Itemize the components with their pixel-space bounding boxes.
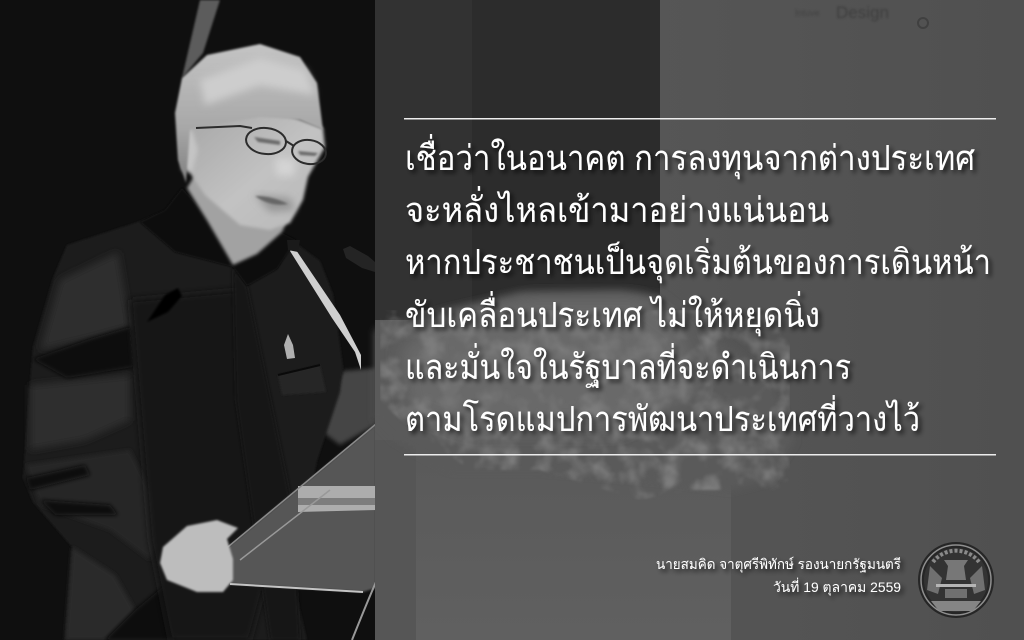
face — [182, 108, 325, 230]
microphone — [290, 247, 361, 370]
lectern — [223, 424, 376, 592]
main quote: ขับเคลื่อนประเทศ ไม่ให้หยุดนิ่ง — [405, 291, 820, 336]
chest shading — [130, 290, 280, 640]
faint screen wording: Design — [836, 3, 889, 22]
main quote: ตามโรดแมปการพัฒนาประเทศที่วางไว้ — [405, 395, 920, 439]
attribution — [656, 556, 901, 596]
faint screen wording — [795, 3, 928, 28]
pedestal box — [416, 425, 731, 640]
nose and mouth shadow — [255, 195, 295, 212]
jacket placket — [233, 267, 300, 640]
flowers behind lectern — [320, 368, 376, 445]
photo: speaker on dark stage — [0, 0, 376, 640]
bottom rule — [404, 454, 996, 456]
jacket shadow folds — [26, 327, 133, 515]
light right side — [375, 0, 1024, 640]
icon: government seal — [918, 542, 994, 618]
jacket — [23, 188, 343, 640]
glasses — [196, 126, 328, 166]
lapel pin — [284, 334, 295, 359]
pocket — [278, 365, 326, 395]
top rule — [404, 118, 996, 120]
panel: right overlay — [375, 0, 1024, 640]
dark flower mottling — [380, 310, 790, 500]
seal: lions — [927, 566, 985, 594]
forearm sheen — [26, 450, 165, 560]
nose — [276, 158, 296, 176]
attribution: นายสมคิด จาตุศรีพิทักษ์ รองนายกรัฐมนตรี — [656, 556, 901, 573]
trouser side — [65, 547, 135, 640]
flower mass — [375, 290, 795, 490]
main quote — [405, 134, 991, 439]
mic shadow — [147, 288, 182, 322]
collar — [140, 188, 296, 286]
seal: arc of dots — [933, 551, 979, 562]
main quote: และมั่นใจในรัฐบาลที่จะดำเนินการ — [405, 343, 851, 388]
stage banner strip — [182, 0, 220, 78]
mouth — [255, 196, 288, 205]
main quote: จะหลั่งไหลเข้ามาอย่างแน่นอน — [405, 186, 829, 230]
top dark column — [375, 0, 660, 320]
hair sheen — [200, 58, 315, 105]
ear — [180, 130, 198, 172]
light flower clusters — [400, 300, 700, 430]
seal: central bowl — [944, 560, 968, 580]
jacket sleeve highlights — [30, 252, 130, 450]
seal: base band — [931, 601, 981, 611]
hair — [175, 44, 323, 183]
soft dark column shape — [375, 0, 660, 320]
faint screen wording: Intuve — [795, 8, 820, 18]
eye shadows — [254, 137, 318, 156]
attribution: วันที่ 19 ตุลาคม 2559 — [773, 578, 901, 596]
neck — [187, 175, 296, 265]
hand — [160, 520, 238, 592]
